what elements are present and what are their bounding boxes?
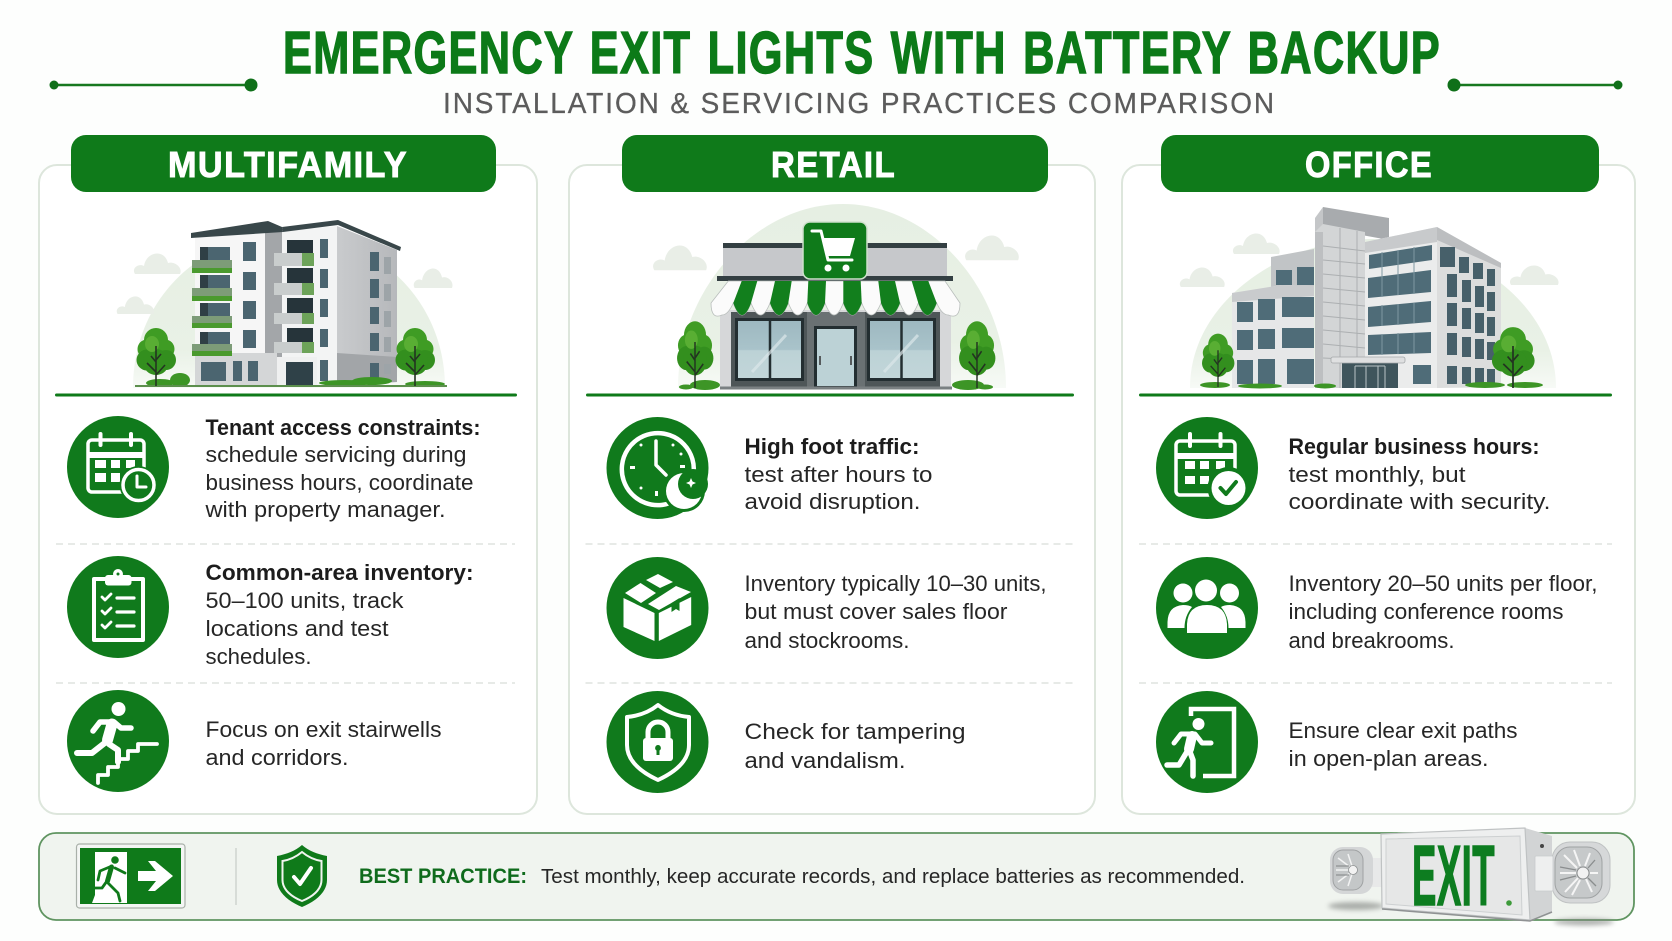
text: stairwells: Focus on exit stairwells [206,717,442,742]
icon: shield with check [277,845,327,907]
heading: multifamily [71,135,496,192]
text: tenant access [204,415,480,522]
text: stairwells: and corridors. [206,745,348,770]
text: business hours: coordinate with security. [1288,489,1550,514]
icon: group of people [1156,557,1258,659]
text: foot traffic: High foot traffic: [744,434,920,459]
right title rule [1448,78,1622,92]
icon: person running up stairs [67,690,169,792]
left title rule [50,78,258,92]
row: stairwells [67,690,442,792]
heading: retail: RETAIL [771,144,896,185]
text: retail inventory: and stockrooms. [744,628,910,653]
text: common-area inventory: Common-area inventory: [206,560,474,585]
text: business hours: Regular business hours: [1288,434,1540,459]
text: common-area inventory: 50–100 units, track [206,588,405,613]
panel: office [1122,135,1635,814]
subtitle: INSTALLATION & SERVICING PRACTICES COMPARISON [443,88,1276,120]
text: office inventory: and breakrooms. [1288,628,1454,653]
icon: package box [606,557,708,659]
text: common-area inventory: schedules. [206,644,312,669]
text: tampering [744,719,966,773]
illustration: apartment building [117,220,453,388]
text: exit paths: Ensure clear exit paths [1288,718,1518,743]
text: office inventory [1288,571,1598,653]
text: office inventory: including conference rooms [1288,599,1564,624]
text: common-area inventory [206,560,474,669]
icon: shopping cart badge [803,222,867,279]
row: retail inventory [606,557,1046,659]
callout text: BEST PRACTICE: [359,865,527,888]
icon: shield with padlock [606,691,708,793]
text: business hours [1288,434,1550,514]
icon: clock with moon [606,417,708,519]
row: common-area inventory [67,556,474,669]
icon: person leaving door [1156,691,1258,793]
heading: retail [622,135,1048,192]
text: retail inventory: Inventory typically 10–30 units, [744,571,1046,596]
text: office inventory: Inventory 20–50 units per floor, [1288,571,1598,596]
text: foot traffic: test after hours to [744,462,932,487]
text: retail inventory [744,571,1046,653]
row: business hours [1156,417,1550,519]
illustration: exit light fixture [1328,828,1614,926]
illustration: exit light fixture: EXIT [1412,829,1495,924]
text: tampering: Check for tampering [744,719,966,744]
text: tenant access: with property manager. [204,497,446,522]
text: exit paths: in open-plan areas. [1288,746,1488,771]
text: business hours: test monthly, but [1288,462,1466,487]
ground line [1139,394,1612,396]
text: foot traffic: avoid disruption. [744,489,920,514]
text: foot traffic [744,434,932,514]
text: retail inventory: but must cover sales floor [744,599,1008,624]
row: tenant access [67,415,480,522]
heading: office [1161,135,1599,192]
illustration: office building [1180,207,1559,388]
text: tenant access: Tenant access constraints: [206,415,480,440]
panel: retail [569,135,1095,814]
text: tenant access: business hours, coordinate [206,470,474,495]
text: exit paths [1288,718,1518,771]
text: tampering: and vandalism. [744,748,906,773]
ground line [55,394,517,396]
icon: calendar with clock [67,416,169,518]
illustration: storefront [653,204,1019,390]
panel: multifamily [39,135,537,814]
row: foot traffic [606,417,932,519]
callout text: Test monthly, keep accurate records, and replace batteries as recommended. [541,866,1245,888]
row: office inventory [1156,557,1598,659]
row: exit paths [1156,691,1518,793]
row: tampering [606,691,966,793]
text: common-area inventory: locations and test [206,616,388,641]
panel: best practice banner [39,828,1634,926]
icon: exit sign with arrow [76,844,185,908]
ground line [586,394,1074,396]
text: stairwells [206,717,442,770]
text: tenant access: schedule servicing during [206,442,466,467]
icon: calendar with check [1156,417,1258,519]
heading: multifamily: MULTIFAMILY [168,144,408,185]
heading: office: OFFICE [1305,144,1433,185]
icon: clipboard checklist [67,556,169,658]
